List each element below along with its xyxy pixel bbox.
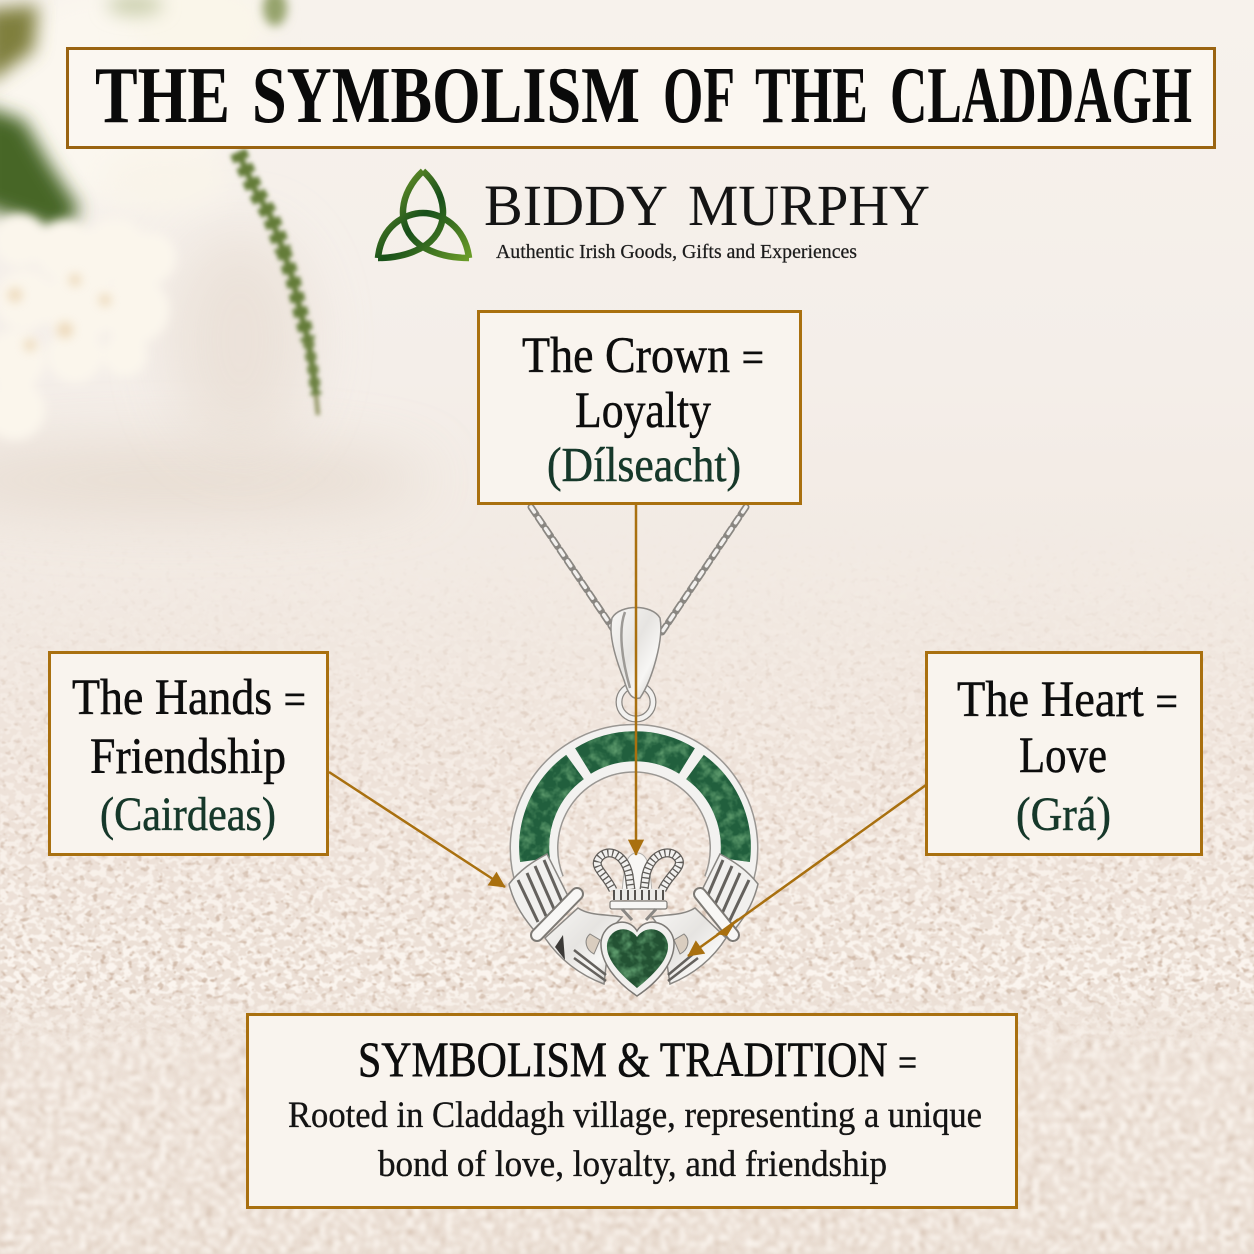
stone: left: [534, 767, 575, 860]
callout: the hands: Friendship: [90, 729, 286, 785]
heart stone: [601, 922, 674, 996]
necklace chain: [531, 507, 746, 636]
stone: right: [695, 767, 736, 860]
callout: the heart: The Heart =: [957, 672, 1178, 728]
callout: the crown: (Dílseacht): [547, 437, 741, 492]
left sleeve: [509, 854, 568, 935]
callout: the heart: Love: [1019, 728, 1107, 784]
left hand: [537, 894, 622, 984]
callout: the hands: [50, 652, 328, 854]
logo: Biddy Murphy: [378, 171, 930, 263]
logo: Biddy Murphy: BIDDY: [484, 173, 668, 238]
callout: the heart: [926, 652, 1202, 854]
callout: symbolism and tradition: bond of love, loyalty, and friendship: [378, 1144, 887, 1185]
title banner: OF: [663, 52, 735, 140]
callout: the crown: The Crown =: [522, 328, 764, 384]
title banner: THE: [95, 52, 230, 140]
callout: symbolism and tradition: Rooted in Claddagh village, representing a unique: [288, 1095, 982, 1136]
title banner: THE: [755, 52, 868, 140]
callout: the heart: (Grá): [1016, 788, 1111, 841]
logo: Biddy Murphy: Authentic Irish Goods, Gifts and Experiences: [496, 241, 857, 263]
callout: the crown: [478, 312, 800, 504]
icon: green triquetra knot: [378, 171, 469, 258]
arrow: crown: [635, 504, 637, 855]
callout: symbolism and tradition: SYMBOLISM & TRADITION =: [358, 1031, 917, 1087]
right hand: [652, 894, 733, 984]
pendant ring: [534, 748, 734, 885]
callout: the crown: Loyalty: [575, 383, 711, 439]
right sleeve: [699, 854, 758, 935]
stone: top: [583, 746, 687, 761]
logo: Biddy Murphy: MURPHY: [688, 173, 930, 238]
title banner: SYMBOLISM: [252, 52, 640, 140]
pendant ring link: [619, 685, 653, 719]
title banner: [68, 48, 1214, 148]
pendant bail: [611, 608, 661, 698]
arrow: hands: [329, 772, 505, 887]
arrow: heart: [688, 785, 926, 956]
callout: symbolism and tradition: [248, 1014, 1016, 1208]
callout: the hands: The Hands =: [72, 670, 306, 726]
claddagh pendant: [509, 608, 758, 996]
crown: [597, 853, 679, 920]
callout: the hands: (Cairdeas): [100, 788, 276, 841]
